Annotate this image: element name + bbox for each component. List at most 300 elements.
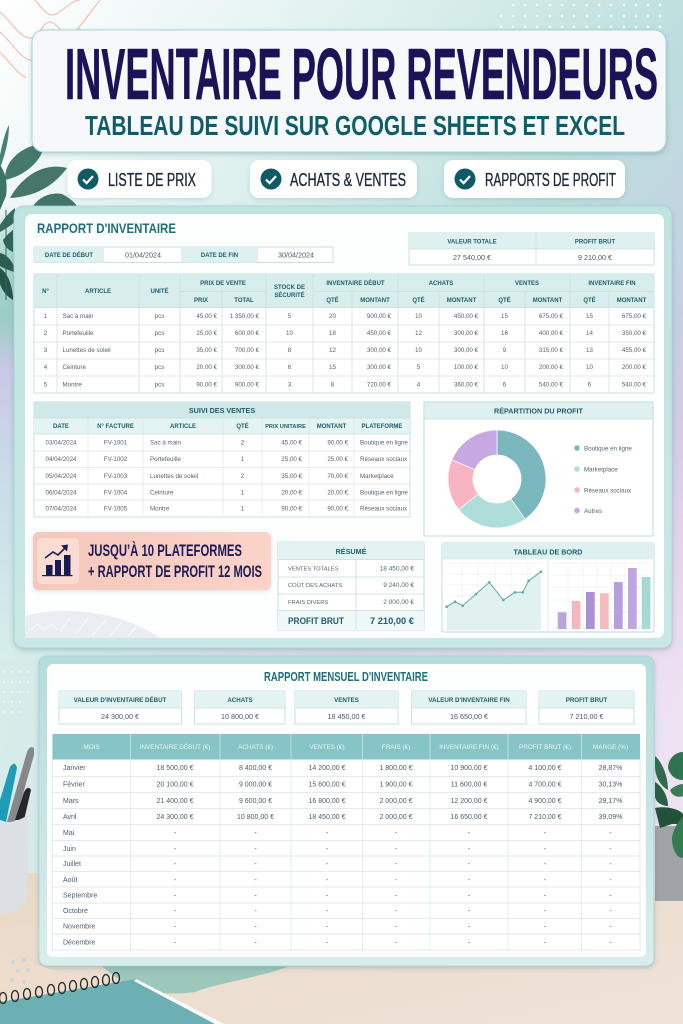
totals box [409,233,654,265]
monthly rows with data: 20 100,00 € [157,782,194,788]
sales rows: Boutique en ligne [360,440,408,446]
table rows: 13 [586,347,593,354]
icon: check [454,168,476,190]
monthly rows empty: - [544,877,547,884]
table header: N° [42,289,49,295]
table header: ARTICLE [85,289,111,295]
kpi: valeur début: VALEUR D'INVENTAIRE DÉBUT [74,696,167,704]
kpi: achats [194,691,285,724]
table rows: 12 [329,347,336,354]
monthly header: INVENTAIRE DÉBUT (€) [140,742,210,751]
table rows: 200,00 € [622,364,647,371]
table rows: 15 [329,364,336,371]
table rows [44,313,647,388]
icon: black pen [15,788,31,820]
kpi: profit brut: PROFIT BRUT [566,697,608,704]
icon: blue pen [0,764,17,822]
table rows: 540,00 € [622,382,647,388]
monthly rows empty: - [254,830,257,837]
panel: résumé: VENTES TOTALES [288,566,339,572]
totals box: PROFIT BRUT [575,240,615,246]
sales rows: Réseaux sociaux [360,456,408,463]
monthly rows empty: - [544,892,547,900]
table rows: pcs [155,347,164,354]
table rows: 4 [44,364,48,371]
sales rows: 1 [241,506,245,512]
sales rows: FV-1003 [104,473,128,480]
monthly rows with data: 1 900,00 € [379,782,413,788]
sales rows: 1 [241,456,245,463]
donut chart [448,430,546,528]
table rows: 600,00 € [235,330,260,337]
table rows: 300,00 € [454,330,479,337]
monthly rows empty: - [395,830,398,837]
monthly header [83,742,628,751]
panel: tableau de bord [442,543,654,632]
table rows: 15 [586,313,593,320]
notebook [0,952,224,1024]
panel: résumé: 18 450,00 € [380,566,414,572]
sales rows: 06/04/2024 [46,490,77,496]
panel: résumé [278,542,424,630]
table rows: 350,00 € [622,330,647,337]
bar chart [551,563,652,630]
monthly rows empty: - [468,908,471,915]
monthly rows with data: 18 500,00 € [157,765,194,772]
monthly rows with data: 16 650,00 € [451,814,488,821]
monthly rows empty: Novembre [63,924,95,930]
table rows: 1 350,00 € [230,313,260,320]
legend: Marketplace [584,466,618,474]
monthly rows empty: - [544,846,547,853]
monthly rows empty [63,830,612,946]
monthly rows empty: Septembre [63,892,97,900]
monthly rows empty: - [174,924,177,930]
monthly rows empty: - [174,830,177,837]
table rows: Montre [62,382,82,388]
table rows: Ceinture [62,364,86,371]
badge: achats et ventes: ACHATS & VENTES [290,170,406,190]
table rows: 300,00 € [235,364,260,371]
monthly rows empty: - [468,830,471,837]
panel: résumé: PROFIT BRUT [288,615,344,626]
sales rows: Réseaux sociaux [360,506,408,512]
sales rows: 20,00 € [327,490,349,496]
sales rows: Marketplace [360,473,394,480]
monthly rows empty: - [609,908,612,915]
panel: répartition du profit [424,402,653,536]
date fields: 01/04/2024 [125,250,161,260]
sales header: PRIX UNITAIRE [265,424,306,430]
sales header: N° FACTURE [97,424,134,430]
table rows: 35,00 € [196,347,218,354]
sales rows: 07/04/2024 [46,506,77,512]
decoration: white dots [500,4,661,28]
monthly rows empty: Décembre [63,940,95,946]
table rows: 10 [415,347,422,354]
table rows: 12 [415,330,422,337]
sales header: QTÉ [236,422,249,430]
monthly rows empty: - [544,908,547,915]
totals box: VALEUR TOTALE [447,240,497,246]
monthly rows with data: 28,87% [599,765,622,772]
totals box: 9 210,00 € [578,253,612,262]
monthly rows empty: - [395,940,398,946]
icon: check [260,168,282,190]
table: inventaire [34,274,654,393]
pen cup [0,747,34,914]
monthly rows with data: 4 900,00 € [528,798,562,805]
monthly rows empty: - [609,940,612,946]
table rows: pcs [155,364,164,371]
monthly rows empty: - [468,877,471,884]
monthly rows empty: - [254,861,257,868]
sales rows: 90,00 € [327,440,349,446]
table header [42,279,647,304]
legend: Autres [584,508,602,515]
panel: résumé: 9 240,00 € [383,582,414,589]
kpi: profit brut: 7 210,00 € [570,712,603,721]
sales header: DATE [53,424,69,430]
panel: rapport d'inventaire [14,206,672,648]
table rows: 16 [501,330,508,337]
badge: liste de prix [68,160,212,198]
sales rows: 20,00 € [281,490,303,496]
monthly header: VENTES (€) [309,744,345,751]
legend: Boutique en ligne [584,446,632,452]
legend [574,445,632,515]
table rows: 14 [586,330,593,337]
plant: left leaves [0,125,77,300]
table rows: 540,00 € [539,382,564,388]
monthly rows with data: Mars [63,798,79,805]
line chart [445,563,543,630]
table rows: 900,00 € [367,313,392,320]
table header: QTÉ [412,296,425,304]
sales rows: 1 [241,490,245,496]
monthly rows with data: Janvier [63,765,86,772]
monthly rows empty: Mai [63,830,75,837]
monthly rows empty: - [254,940,257,946]
table: suivi des ventes [34,402,410,517]
icon: grey pen [7,747,34,822]
monthly rows empty: - [544,861,547,868]
decoration: chevron hump [25,611,160,638]
table rows: 10 [415,313,422,320]
icon: check [78,168,98,190]
table rows: pcs [155,382,164,388]
sales header: ARTICLE [170,424,196,430]
table rows: 1 [44,313,48,320]
table: mensuel [53,734,640,950]
table rows: 100,00 € [454,364,479,371]
monthly rows empty: - [468,924,471,930]
monthly rows empty: - [544,924,547,930]
table header: PRIX [194,298,208,304]
monthly rows with data: 9 000,00 € [239,782,272,788]
monthly rows empty: - [254,892,257,900]
table rows: 2 [44,330,48,337]
sales rows: Lunettes de soleil [150,473,198,480]
monthly header: FRAIS (€) [382,744,410,751]
monthly rows with data: 14 200,00 € [309,765,346,772]
panel: résumé: RÉSUMÉ [336,547,367,556]
monthly rows empty: - [609,924,612,930]
monthly header: ACHATS (€) [238,744,273,751]
monthly rows empty: - [254,846,257,853]
sales rows: 25,00 € [327,456,349,463]
monthly rows with data: 15 600,00 € [309,782,346,788]
sales rows: 35,00 € [281,473,303,480]
sales header: MONTANT [317,424,347,430]
monthly rows empty: - [326,830,329,837]
table rows: 20,00 € [196,364,218,371]
table rows: 3 [288,382,292,388]
table rows: 3 [44,347,48,354]
table rows: 6 [288,364,292,371]
monthly rows empty: - [395,924,398,930]
monthly rows empty: - [609,861,612,868]
table rows: 9 [503,347,507,354]
callout: plateformes: + RAPPORT DE PROFIT 12 MOIS [88,562,262,581]
legend: Réseaux sociaux [584,488,632,494]
table rows: 455,00 € [622,347,647,354]
table header: TOTAL [234,298,254,304]
table header: SÉCURITÉ [274,291,305,299]
monthly header: INVENTAIRE FIN (€) [439,744,499,751]
monthly rows with data: 10 800,00 € [237,814,274,821]
table rows: 20 [329,313,336,320]
table rows: 8 [331,382,335,388]
monthly rows empty: - [326,940,329,946]
table rows: 400,00 € [539,330,564,337]
table rows: 18 [329,330,336,337]
monthly rows empty: - [544,830,547,837]
date fields: DATE DE DÉBUT [45,251,93,259]
monthly rows empty: - [468,940,471,946]
table rows: 720,00 € [367,382,392,388]
monthly rows empty: - [609,877,612,884]
monthly rows empty: Juillet [63,861,81,868]
monthly rows empty: - [609,892,612,900]
monthly rows empty: - [395,846,398,853]
heading: rapport d'inventaire: RAPPORT D'INVENTAIRE [37,220,176,236]
table rows: 6 [503,382,507,388]
monthly header: MARGE (%) [593,744,628,751]
monthly rows empty: - [544,940,547,946]
monthly rows empty: - [395,908,398,915]
monthly rows empty: - [174,846,177,853]
monthly rows with data: 39,09% [599,814,622,821]
table rows: Sac à main [62,313,94,320]
table rows: 200,00 € [539,364,564,371]
table rows: Lunettes de soleil [62,347,111,354]
table rows: 315,00 € [539,347,564,354]
table header: QTÉ [498,296,511,304]
notebook spiral [0,972,120,1004]
sales rows: 90,00 € [281,506,303,512]
kpi: ventes [295,691,398,724]
monthly rows with data [63,765,622,821]
decoration: pink waves [0,0,100,78]
table rows: Portefeuille [62,330,94,337]
table rows: 4 [417,382,421,388]
totals box: 27 540,00 € [453,253,491,262]
monthly rows with data: 1 800,00 € [379,765,413,772]
monthly rows with data: Avril [63,814,77,821]
sales rows: 2 [241,440,245,446]
sales rows: Boutique en ligne [360,490,408,496]
table rows: 5 [288,313,292,320]
table rows: 45,00 € [196,313,218,320]
kpi: achats: ACHATS [227,697,253,704]
panel: répartition du profit: RÉPARTITION DU PROFIT [494,406,584,416]
monthly rows empty: - [174,940,177,946]
table header: MONTANT [447,298,477,304]
sales rows: FV-1004 [104,490,128,496]
table header: PRIX DE VENTE [200,281,246,287]
sales rows: 70,00 € [327,473,349,480]
table rows: 700,00 € [235,347,260,354]
monthly rows with data: 16 800,00 € [309,798,346,805]
monthly rows empty: - [254,908,257,915]
table rows: 15 [501,313,508,320]
monthly rows with data: Février [63,782,85,788]
monthly rows with data: 24 300,00 € [157,814,194,821]
monthly rows empty: - [174,908,177,915]
sales rows: 04/04/2024 [46,456,77,463]
table header: STOCK DE [274,285,305,291]
monthly rows empty: Juin [63,846,76,853]
badge: liste de prix: LISTE DE PRIX [108,170,196,190]
sales rows: Ceinture [150,490,174,496]
monthly rows empty: - [468,846,471,853]
monthly rows empty: - [326,924,329,930]
monthly rows empty: Octobre [63,908,88,915]
table rows: 360,00 € [454,382,479,388]
monthly rows empty: Août [63,877,77,884]
monthly rows empty: - [326,892,329,900]
table rows: 900,00 € [235,382,260,388]
monthly rows with data: 8 400,00 € [239,765,272,772]
monthly rows empty: - [174,892,177,900]
monthly header: PROFIT BRUT (€) [519,744,571,751]
table rows: 25,00 € [196,330,218,337]
monthly rows with data: 2 000,00 € [379,798,413,805]
kpi: valeur fin: 16 650,00 € [450,712,488,721]
table rows: 450,00 € [454,313,479,320]
sales rows: 03/04/2024 [46,440,77,446]
table rows: 300,00 € [367,347,392,354]
table header: MONTANT [533,298,563,304]
table header: QTÉ [326,296,339,304]
monthly rows empty: - [395,892,398,900]
monthly rows with data: 29,17% [599,798,622,805]
table rows: 10 [286,330,293,337]
table rows: pcs [155,313,164,320]
sales rows [46,440,408,512]
monthly rows with data: 11 600,00 € [451,782,487,788]
monthly rows empty: - [174,861,177,868]
sales rows: FV-1001 [104,440,128,446]
monthly rows with data: 10 900,00 € [451,765,488,772]
sales rows: Portefeuille [150,456,182,463]
monthly rows with data: 9 600,00 € [239,798,272,805]
kpi: achats: 10 800,00 € [221,712,259,721]
badge: rapports de profit: RAPPORTS DE PROFIT [485,170,616,190]
table rows: 675,00 € [539,313,564,320]
table rows: 6 [588,382,592,388]
callout: plateformes [33,532,271,590]
panel: résumé: 7 210,00 € [370,616,415,627]
kpi: valeur début [59,691,182,724]
monthly rows empty: - [326,861,329,868]
sales rows: 05/04/2024 [46,473,77,480]
header panel [32,30,666,152]
sales rows: FV-1005 [104,506,128,512]
monthly rows empty: - [468,861,471,868]
table rows: 675,00 € [622,313,647,320]
table header: MONTANT [360,298,390,304]
date fields [34,247,333,262]
monthly rows with data: 12 200,00 € [451,798,488,805]
table header: INVENTAIRE DÉBUT [326,279,385,287]
cup [0,815,28,914]
table rows: 300,00 € [454,347,479,354]
sales rows: FV-1002 [104,456,128,463]
monthly rows with data: 4 100,00 € [528,765,562,772]
badge: rapports de profit [444,160,625,198]
sales rows: Montre [150,506,170,512]
monthly rows empty: - [609,846,612,853]
table rows: 450,00 € [367,330,392,337]
monthly header: MOIS [83,744,100,751]
monthly rows with data: 2 000,00 € [379,814,413,821]
sales rows: 2 [241,473,245,480]
sales rows: 25,00 € [281,456,303,463]
table header: QTÉ [583,296,596,304]
kpi: ventes: 18 450,00 € [328,712,365,721]
table header: VENTES [515,281,539,287]
heading: rapport mensuel: RAPPORT MENSUEL D'INVENTAIRE [264,669,428,684]
monthly rows empty: - [395,861,398,868]
date fields: 30/04/2024 [278,250,314,260]
panel: résumé: 2 000,00 € [383,599,414,606]
table rows: 10 [501,364,508,371]
sales rows: 90,00 € [327,506,349,512]
monthly rows empty: - [254,924,257,930]
table rows: 8 [288,347,292,354]
sales rows: 45,00 € [281,440,303,446]
table header: UNITÉ [150,287,168,295]
panel: tableau de bord: TABLEAU DE BORD [514,548,582,556]
table header: ACHATS [429,281,453,287]
monthly rows empty: - [326,846,329,853]
table header: MONTANT [617,298,647,304]
sales header [53,422,402,430]
table rows: 5 [44,382,48,388]
sales header: PLATEFORME [362,424,402,430]
icon: growth chart [42,544,72,576]
kpi: valeur début: 24 300,00 € [101,712,139,721]
monthly rows empty: - [468,892,471,900]
monthly rows with data: 7 210,00 € [528,814,562,821]
badge: achats et ventes [250,160,417,198]
table rows: pcs [155,330,164,337]
monthly rows with data: 30,13% [599,782,622,788]
decoration: dots on the left wall [3,671,29,713]
panel: rapport mensuel [39,656,654,994]
